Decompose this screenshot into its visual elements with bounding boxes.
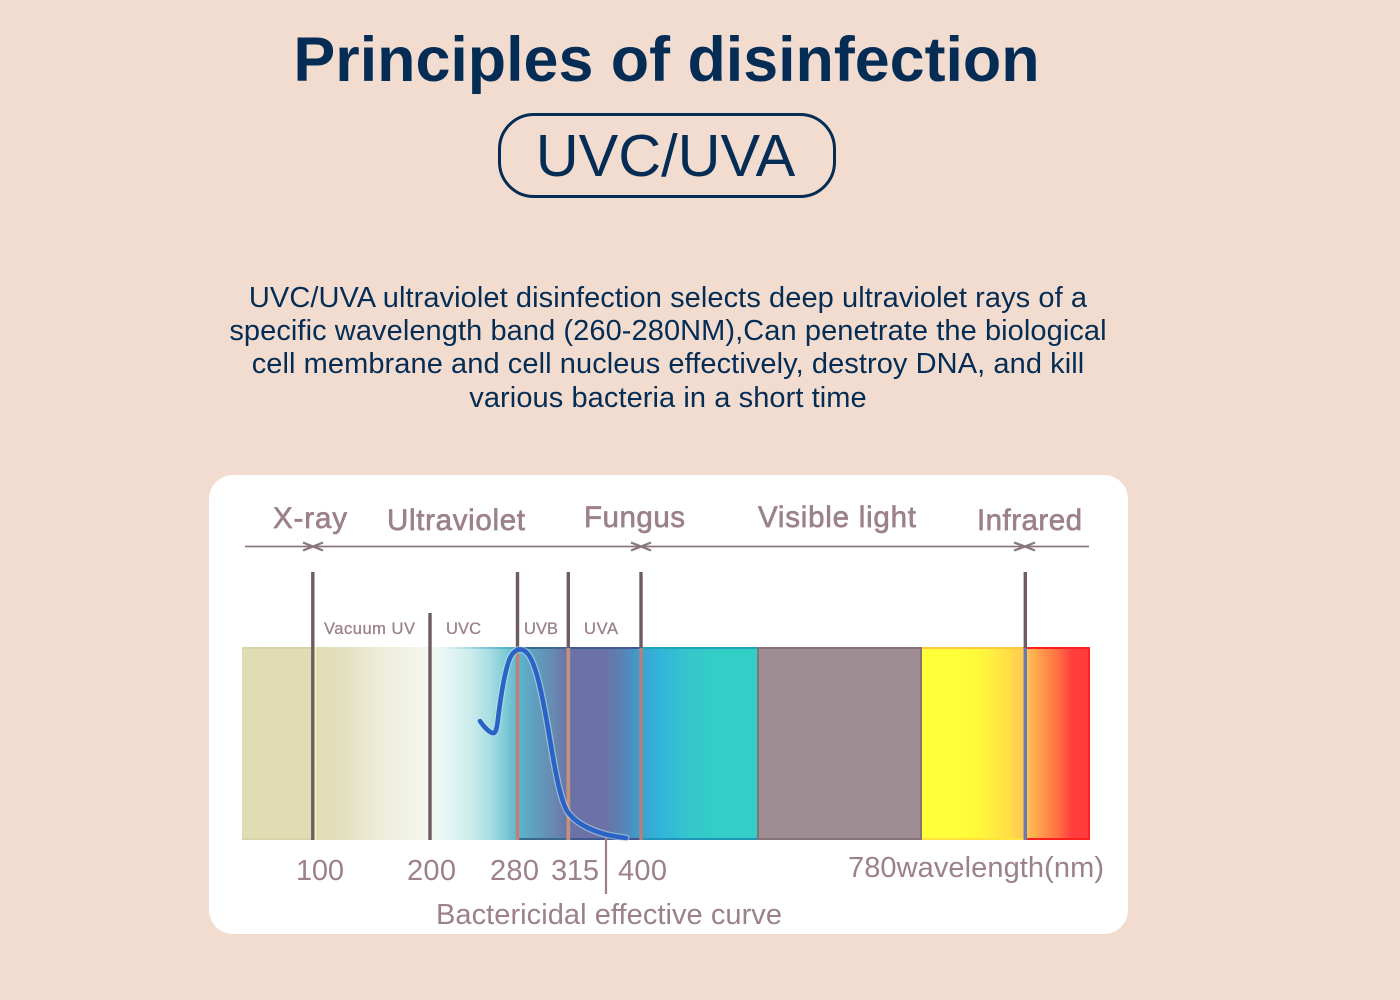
curve caption: Bactericidal effective curve [436, 899, 782, 931]
wavelength axis labels [296, 852, 1104, 887]
title: Principles of disinfection [293, 24, 1040, 94]
band labels: Vacuum UV [324, 620, 415, 638]
badge: UVC/UVA: UVC/UVA [536, 122, 795, 189]
description text: various bacteria in a short time [469, 382, 867, 414]
band labels: UVB [524, 620, 558, 638]
heading labels: Visible light [758, 501, 916, 534]
heading labels [273, 501, 1082, 537]
heading labels: Infrared [977, 504, 1082, 537]
bactericidal effective curve [480, 649, 626, 838]
wavelength axis labels: 280 [490, 855, 539, 887]
wavelength axis labels: 200 [407, 855, 456, 887]
description text: UVC/UVA ultraviolet disinfection selects deep ultraviolet rays of a [249, 282, 1087, 314]
wavelength axis labels: 400 [618, 855, 667, 887]
spectrum bar [242, 647, 1090, 840]
curve pointer line [605, 838, 607, 894]
band labels [324, 620, 618, 638]
heading labels: X-ray [273, 502, 347, 535]
heading labels: Ultraviolet [387, 504, 525, 537]
wavelength marker lines [313, 572, 1025, 840]
wavelength axis labels: 780wavelength(nm) [848, 852, 1104, 884]
band labels: UVC [446, 620, 481, 638]
wavelength axis labels: 315 [551, 855, 599, 887]
description text: cell membrane and cell nucleus effectively, destroy DNA, and kill [252, 348, 1084, 380]
badge: UVC/UVA [498, 113, 836, 198]
heading labels: Fungus [584, 501, 685, 534]
description text [229, 282, 1107, 414]
range arrow line [245, 542, 1089, 550]
panel: spectrum chart card [209, 475, 1128, 934]
band labels: UVA [584, 620, 618, 638]
wavelength axis labels: 100 [296, 855, 344, 887]
description text: specific wavelength band (260-280NM),Can penetrate the biological [229, 315, 1107, 347]
